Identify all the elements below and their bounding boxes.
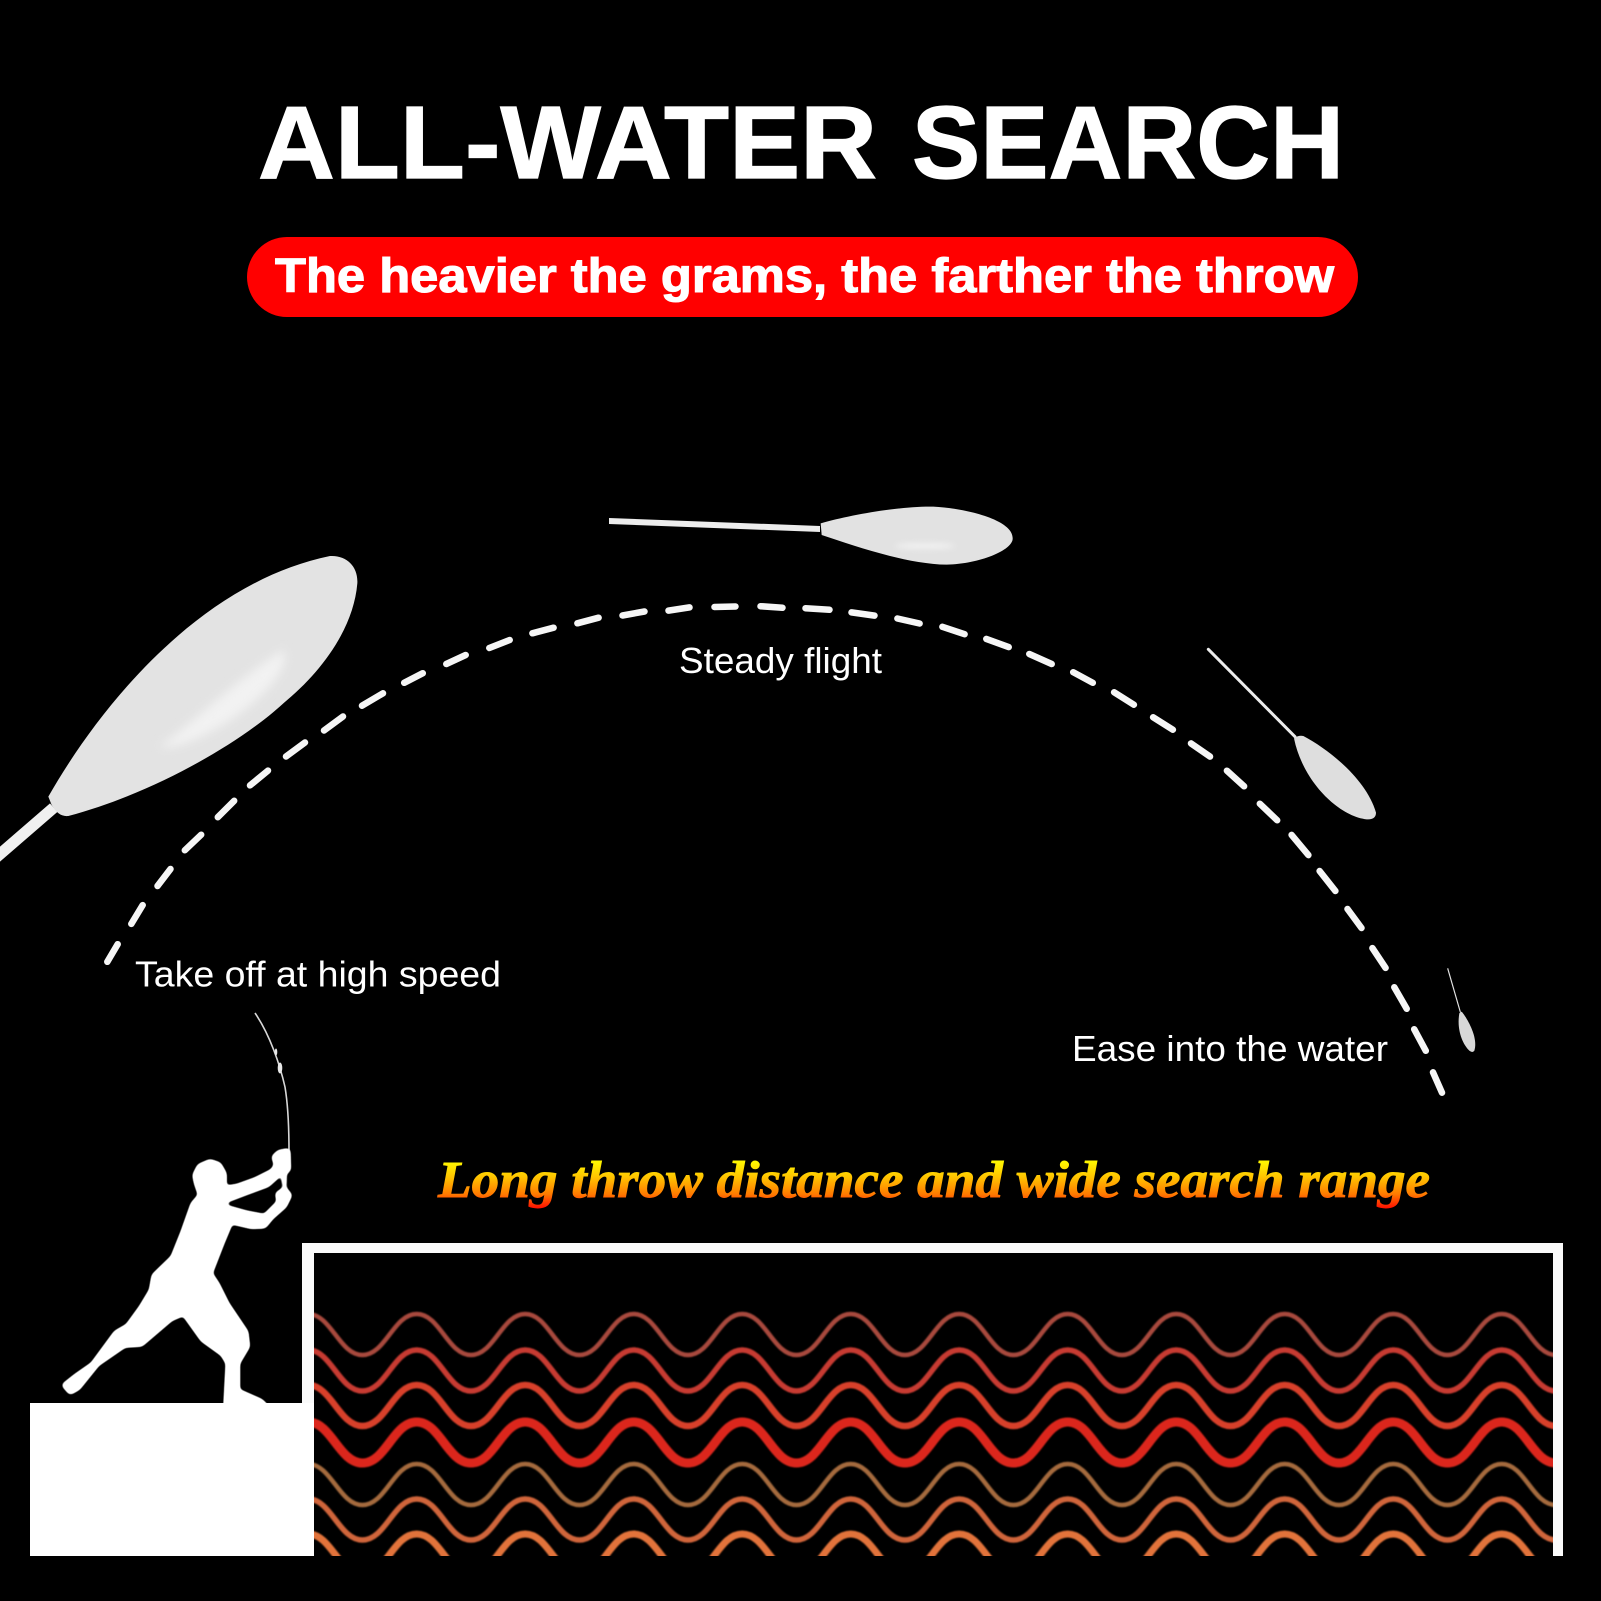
water waves	[308, 1314, 1601, 1575]
label: ease into the water: Ease into the water	[1072, 1028, 1388, 1069]
float at top of arc	[609, 507, 1013, 565]
pedestal	[30, 1403, 314, 1556]
label: steady flight: Steady flight	[679, 640, 882, 681]
red subtitle pill	[247, 237, 1358, 317]
angler silhouette	[62, 1149, 291, 1408]
water frame	[302, 1243, 1563, 1556]
large float at take-off	[0, 556, 357, 862]
descending float	[1208, 649, 1376, 819]
title: SEARCH	[912, 85, 1344, 200]
gradient caption: Long throw distance and wide search range	[437, 1152, 1430, 1209]
title: ALL-WATER	[258, 85, 877, 200]
fishing rod	[255, 1013, 289, 1152]
red subtitle pill: The heavier the grams, the farther the throw	[275, 250, 1335, 303]
label: take off: Take off at high speed	[135, 954, 501, 994]
title	[258, 85, 1344, 200]
dashed flight arc	[107, 606, 1442, 1093]
small float entering water	[1448, 968, 1475, 1052]
